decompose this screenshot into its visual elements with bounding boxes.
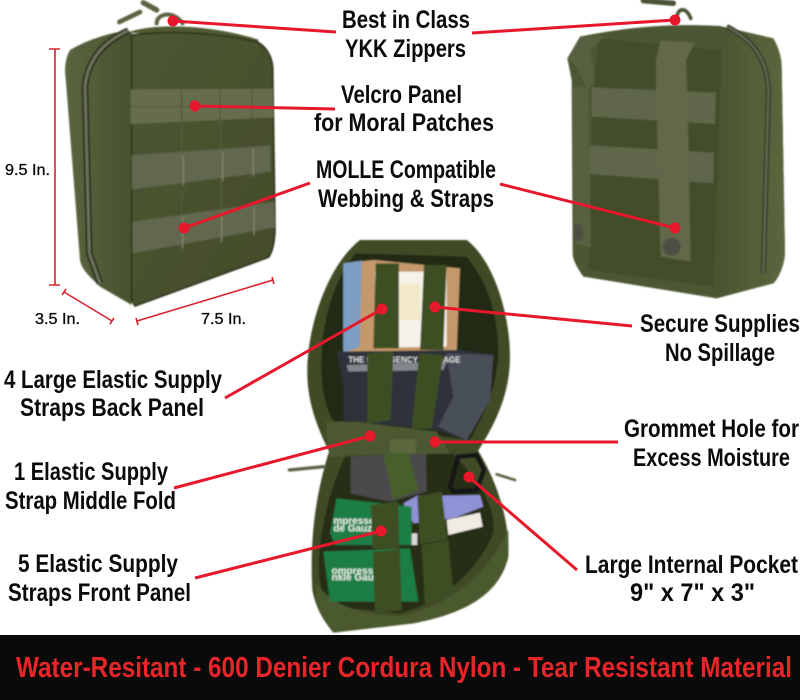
label [342, 6, 470, 63]
callout: MOLLE webbing [178, 156, 680, 234]
back panel [588, 38, 722, 287]
label: 1 Elastic Supply [14, 458, 168, 486]
label [624, 415, 799, 472]
callout: velcro panel [190, 81, 494, 137]
dimension label: width: 7.5 In. [201, 311, 246, 328]
label: Straps Front Panel [8, 579, 191, 607]
side panel [65, 30, 133, 305]
zipper pulls [289, 467, 515, 480]
photo: pouch front view [65, 3, 275, 306]
pointer left [168, 16, 336, 32]
photo: open pouch with supplies: ompressed [332, 566, 385, 577]
pointer [225, 304, 388, 398]
label: Velcro Panel [341, 81, 462, 109]
zipper pull [119, 3, 183, 23]
pointer [430, 436, 618, 448]
label [314, 81, 494, 137]
label: 5 Elastic Supply [18, 550, 178, 578]
dimension: depth 3.5 in [62, 289, 114, 324]
pointer left [178, 183, 310, 234]
left strap [567, 36, 605, 247]
scissors [450, 455, 484, 492]
snap buttons [663, 238, 681, 256]
zipper [727, 27, 768, 273]
dimension label: height: 9.5 In. [5, 162, 50, 179]
callout: grommet hole [430, 415, 799, 472]
bottom banner [0, 635, 800, 700]
middle fold [327, 422, 450, 457]
pointer [430, 302, 632, 326]
upper webbing [592, 87, 716, 124]
top lobe shell [307, 240, 510, 453]
zipper pull [643, 1, 691, 20]
front panel [132, 33, 275, 306]
top lobe lining [321, 253, 498, 440]
photo: open pouch with supplies: mpressed [333, 516, 381, 527]
photo: open pouch with supplies [289, 240, 515, 633]
pointer [174, 430, 376, 488]
body [567, 25, 785, 298]
banner background [0, 635, 800, 700]
pointer right [500, 184, 680, 234]
label: No Spillage [665, 339, 775, 367]
dimension label: depth: 3.5 In. [35, 311, 80, 328]
callout: secure supplies [430, 302, 800, 367]
label [640, 310, 800, 367]
pointer [190, 100, 335, 112]
label: MOLLE Compatible [316, 156, 496, 184]
callout: large internal pocket [464, 472, 799, 607]
pointer [195, 526, 386, 578]
label: Best in Class [342, 6, 470, 34]
callout: front panel straps [8, 526, 386, 607]
pointer [464, 472, 577, 570]
upper webbing strap [132, 145, 271, 189]
dimension: width 7.5 in [136, 277, 274, 325]
velcro panel [131, 89, 273, 124]
label [4, 366, 222, 422]
bottom lobe shell [312, 448, 508, 633]
dressing packages [343, 260, 460, 353]
bottom lobe lining [319, 453, 494, 613]
photo: open pouch with supplies: THE EMERGENCY BANDAGE [348, 356, 461, 365]
photo: open pouch with supplies: nkle Gauze [332, 573, 385, 584]
lower webbing [589, 145, 714, 183]
label: Webbing & Straps [318, 185, 494, 213]
label: Strap Middle Fold [5, 487, 176, 515]
label: YKK Zippers [345, 35, 466, 63]
top seam [130, 27, 258, 41]
label: for Moral Patches [314, 109, 494, 137]
zipper [85, 31, 128, 283]
label [316, 156, 496, 213]
callout: back panel straps [4, 304, 388, 422]
photo: pouch back view [567, 1, 785, 298]
label [5, 458, 176, 515]
label: 9" x 7" x 3" [630, 579, 755, 607]
callout: middle fold strap [5, 430, 376, 515]
dimension: height 9.5 in [49, 49, 60, 285]
pointer right [472, 14, 680, 33]
photo: open pouch with supplies: de Gauze [333, 524, 378, 535]
side panel [713, 27, 785, 297]
elastic straps front panel [371, 502, 399, 550]
right strap [656, 41, 695, 262]
rolled gauze [351, 453, 427, 502]
bottom lip [316, 530, 508, 633]
gauze packs [330, 498, 412, 545]
callout: YKK zippers [168, 6, 680, 63]
center stitching [182, 122, 221, 253]
grey bandage [337, 350, 493, 440]
label [8, 550, 191, 607]
white supplies [403, 495, 483, 523]
label: Straps Back Panel [20, 394, 204, 422]
label [585, 551, 799, 607]
lower webbing strap [132, 202, 275, 253]
elastic straps back panel [373, 263, 399, 348]
label: 4 Large Elastic Supply [4, 366, 222, 394]
